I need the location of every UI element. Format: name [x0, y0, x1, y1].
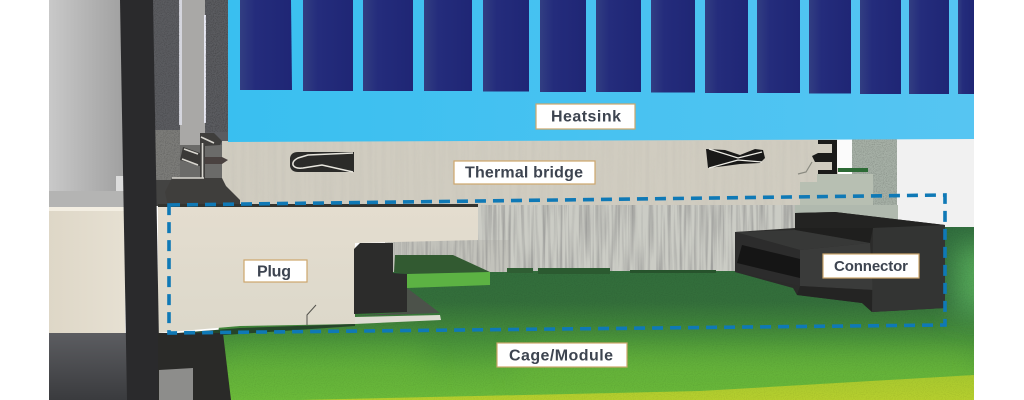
label: Connector: Connector [834, 258, 908, 275]
background: left housing [49, 0, 240, 400]
label: Thermal bridge: Thermal bridge [465, 164, 583, 182]
black front post [120, 0, 160, 400]
white background at right [897, 139, 974, 227]
plug metal rail [355, 288, 441, 324]
clip: left metal hooks [165, 133, 240, 206]
label: Heatsink [536, 104, 635, 129]
heatsink [228, 0, 974, 142]
label: Connector [823, 254, 919, 278]
label: Heatsink: Heatsink [551, 108, 621, 126]
plug black connector [354, 243, 407, 314]
green floor: cage/module [218, 222, 1005, 400]
thermal bridge lower streaks [385, 205, 898, 274]
label: Cage/Module [497, 343, 627, 367]
thermal bridge [165, 133, 897, 240]
connector [735, 212, 945, 312]
label: Thermal bridge [454, 161, 595, 184]
heatsink fins [240, 0, 974, 94]
clip: left spring [290, 152, 354, 172]
bottom-left black base [158, 333, 231, 400]
label: Plug: Plug [257, 264, 291, 280]
clip: right edge bracket [798, 140, 868, 174]
clip: right spring [706, 149, 765, 168]
plug [158, 204, 490, 335]
label: Plug [244, 260, 307, 282]
label: Cage/Module: Cage/Module [509, 348, 613, 364]
dashed outline: plug and connector zone [169, 195, 945, 333]
PCB green [394, 255, 490, 288]
